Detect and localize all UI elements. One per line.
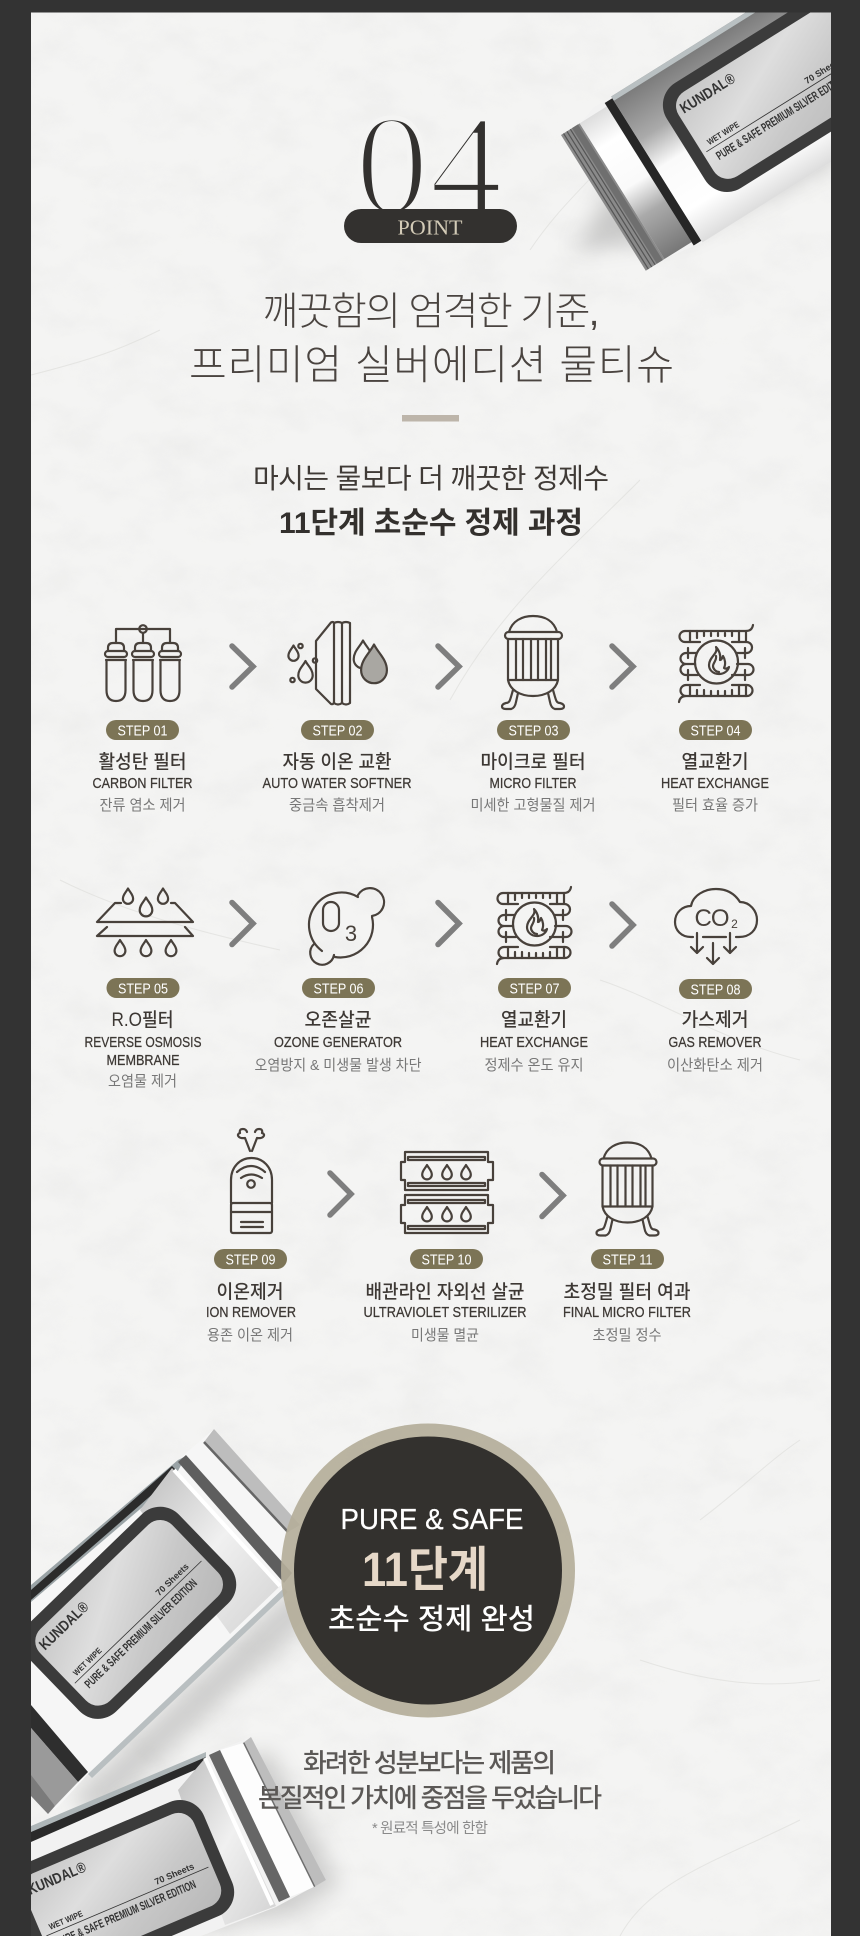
wipes label — [31, 1800, 234, 1936]
badge: STEP 09 — [226, 1252, 276, 1268]
english name: CARBON FILTER — [92, 776, 192, 792]
badge — [106, 720, 179, 740]
badge — [302, 978, 375, 998]
name: 배관라인 자외선 살균 — [366, 1281, 524, 1303]
badge — [679, 720, 752, 740]
badge: STEP 04 — [690, 724, 740, 740]
point number 04: 04 — [355, 86, 503, 244]
product name: WET WIPE — [705, 119, 741, 147]
english name: HEAT EXCHANGE — [480, 1035, 588, 1051]
english name: MEMBRANE — [106, 1053, 180, 1069]
badge — [410, 1249, 483, 1269]
badge: STEP 07 — [510, 982, 560, 998]
english name: ION REMOVER — [206, 1305, 296, 1321]
icon: three filter cartridges — [105, 625, 181, 701]
divider — [402, 415, 459, 422]
english name: ULTRAVIOLET STERILIZER — [364, 1305, 526, 1321]
name: 자동 이온 교환 — [282, 751, 392, 773]
step 07: heat exchange — [480, 887, 588, 1074]
point badge — [344, 209, 517, 243]
step 03: micro filter — [470, 616, 596, 814]
arrow — [542, 1174, 563, 1216]
step 04: heat exchange — [661, 625, 769, 814]
arrow — [232, 902, 253, 944]
wipes label — [662, 12, 831, 192]
icon: filter tank — [596, 1142, 658, 1236]
description: 용존 이온 제거 — [207, 1327, 293, 1344]
icon: heat exchanger with flame — [679, 625, 754, 702]
english name: OZONE GENERATOR — [274, 1035, 402, 1051]
english name: HEAT EXCHANGE — [661, 776, 769, 792]
icon: ion device with steam — [231, 1129, 272, 1233]
english name: GAS REMOVER — [668, 1035, 762, 1051]
description: 미세한 고형물질 제거 — [470, 797, 596, 814]
description: 오염방지 & 미생물 발생 차단 — [254, 1057, 422, 1074]
badge — [498, 978, 571, 998]
badge — [106, 978, 180, 998]
name: 오존살균 — [304, 1009, 372, 1031]
brand name: KUNDAL® — [677, 70, 739, 117]
title: 프리미엄 실버에디션 물티슈 — [189, 342, 674, 388]
closing text: 화려한 성분보다는 제품의 — [303, 1748, 556, 1778]
step 06: ozone generator — [254, 888, 422, 1074]
badge — [497, 720, 570, 740]
arrow — [612, 904, 633, 946]
badge: STEP 03 — [508, 724, 558, 740]
name: 이온제거 — [216, 1281, 284, 1303]
arrow — [438, 902, 459, 944]
step 01: carbon filter — [92, 625, 192, 814]
wipes label — [31, 1506, 236, 1719]
badge: STEP 02 — [312, 724, 362, 740]
description: 오염물 제거 — [108, 1073, 177, 1090]
closing text — [258, 1748, 602, 1813]
title: 깨끗함의 엄격한 기준, — [262, 291, 600, 334]
badge: STEP 01 — [118, 724, 168, 740]
english name: AUTO WATER SOFTNER — [262, 776, 412, 792]
subtitle: 마시는 물보다 더 깨끗한 정제수 — [253, 463, 609, 494]
edition line: PURE & SAFE PREMIUM SILVER EDITION — [82, 1576, 200, 1691]
callout line 3: 초순수 정제 완성 — [328, 1603, 535, 1636]
point badge: POINT — [398, 216, 463, 240]
badge: STEP 10 — [422, 1252, 472, 1268]
badge — [679, 979, 752, 999]
callout line 1: PURE & SAFE — [340, 1504, 524, 1536]
step 05: reverse osmosis — [84, 888, 202, 1090]
brand name: KUNDAL® — [36, 1598, 92, 1654]
name: 열교환기 — [501, 1009, 567, 1031]
name: 열교환기 — [682, 751, 748, 773]
english name: FINAL MICRO FILTER — [563, 1305, 691, 1321]
step 09: ion remover — [206, 1129, 296, 1344]
arrow — [232, 646, 253, 687]
description: 중금속 흡착제거 — [289, 797, 385, 814]
sheet count: 70 Sheets — [803, 55, 844, 86]
product name: WET WIPE — [71, 1645, 104, 1678]
product pack: bottom left lower — [2, 1737, 340, 1936]
product name: WET WIPE — [47, 1908, 85, 1932]
name: 초정밀 필터 여과 — [564, 1281, 690, 1303]
sheet count: 70 Sheets — [153, 1861, 196, 1887]
badge: STEP 06 — [314, 982, 364, 998]
arrow — [330, 1173, 351, 1215]
icon: CO2 cloud — [675, 889, 757, 964]
english name: MICRO FILTER — [490, 776, 576, 792]
arrow — [612, 646, 633, 687]
step 02: auto water softener — [262, 622, 412, 814]
icon: UV trays — [401, 1152, 493, 1233]
name: 활성탄 필터 — [98, 751, 186, 773]
icon: ozone molecule — [309, 888, 384, 965]
description: 정제수 온도 유지 — [484, 1057, 584, 1074]
name: 마이크로 필터 — [480, 751, 586, 773]
english name — [84, 1035, 202, 1069]
footnote: * 원료적 특성에 한함 — [372, 1820, 488, 1837]
step 10: ultraviolet sterilizer — [364, 1152, 526, 1344]
icon: CO2 cloud: CO — [694, 905, 730, 932]
description: 이산화탄소 제거 — [667, 1057, 763, 1074]
badge: STEP 08 — [690, 982, 740, 998]
badge — [214, 1249, 287, 1269]
icon: CO2 cloud: 2 — [731, 917, 738, 931]
brand name: KUNDAL® — [25, 1859, 89, 1899]
badge — [591, 1249, 664, 1269]
product pack: top right — [561, 12, 831, 271]
sheet count: 70 Sheets — [154, 1561, 191, 1598]
badge — [301, 720, 374, 740]
icon: membrane sheets and drops — [97, 888, 193, 956]
icon: filter tank — [502, 616, 564, 709]
description: 잔류 염소 제거 — [100, 797, 186, 814]
closing text: 본질적인 가치에 중점을 두었습니다 — [258, 1783, 602, 1813]
subtitle — [253, 463, 609, 540]
description: 초정밀 정수 — [592, 1327, 662, 1344]
name: 가스제거 — [682, 1009, 748, 1031]
description: 필터 효율 증가 — [672, 797, 758, 814]
step 08: gas remover — [667, 889, 763, 1074]
badge: STEP 11 — [602, 1252, 652, 1268]
callout line 2: 11단계 — [362, 1544, 488, 1597]
callout: pure and safe circle — [281, 1424, 575, 1718]
name: R.O필터 — [112, 1009, 174, 1031]
icon: filter plates and drops — [288, 622, 387, 704]
step 11: final micro filter — [563, 1142, 691, 1344]
badge: STEP 05 — [118, 982, 168, 998]
subtitle: 11단계 초순수 정제 과정 — [279, 507, 583, 540]
icon: heat exchanger with flame — [497, 887, 572, 964]
icon: ozone molecule: 3 — [345, 921, 357, 946]
product pack: bottom left upper — [31, 1429, 298, 1814]
title — [189, 291, 674, 388]
description: 미생물 멸균 — [411, 1327, 479, 1344]
arrow — [438, 646, 459, 687]
english name: REVERSE OSMOSIS — [84, 1035, 202, 1051]
